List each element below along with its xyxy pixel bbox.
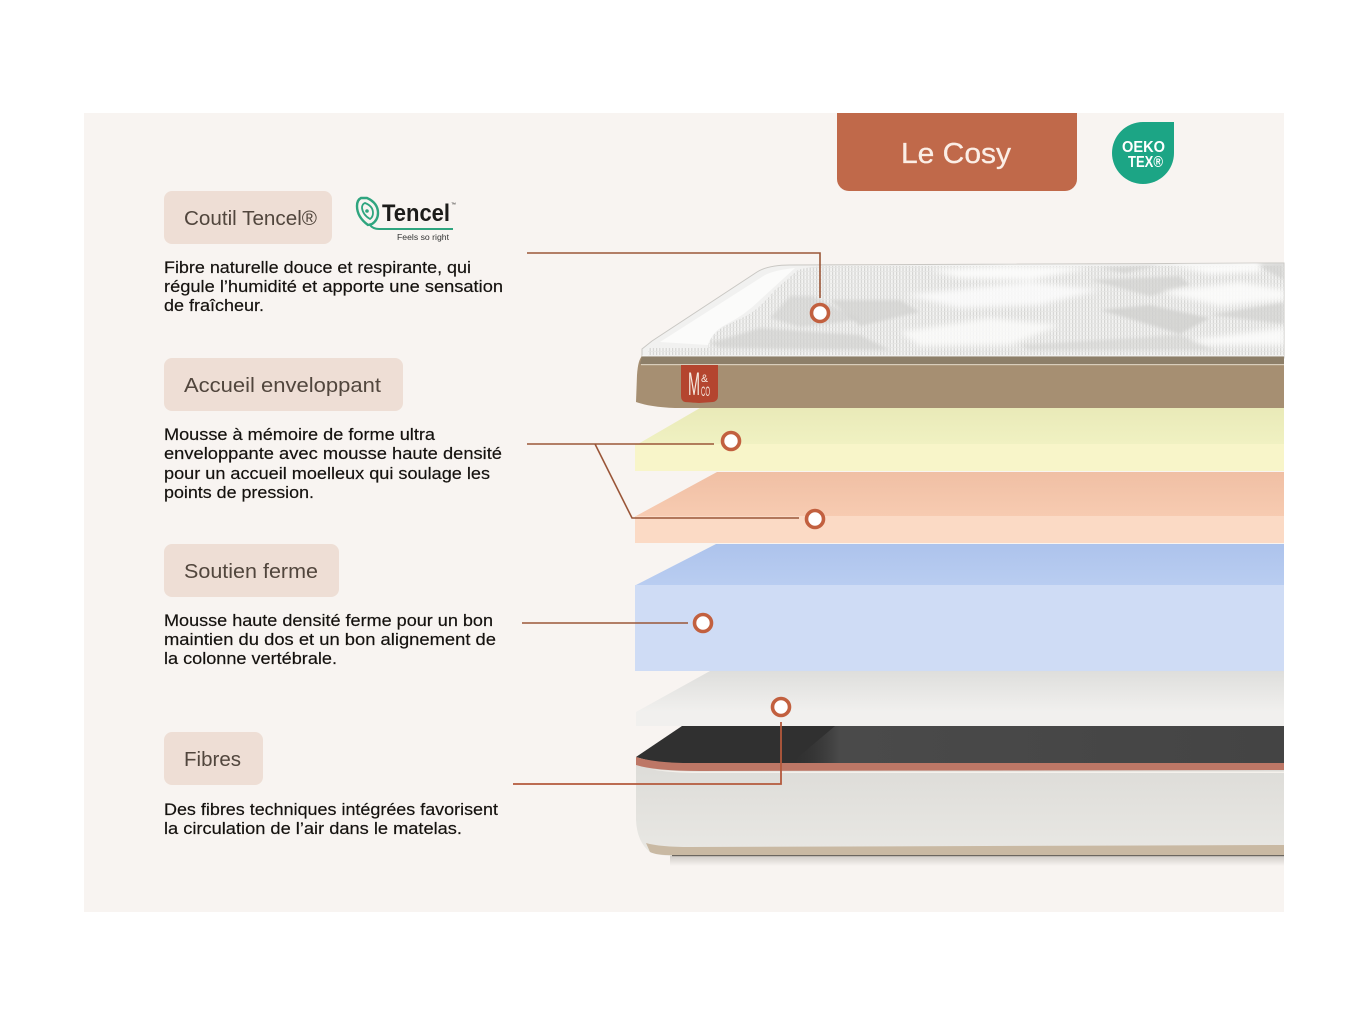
- tag: Coutil Tencel: [164, 191, 332, 244]
- section: Fibres: [164, 732, 499, 838]
- tag: Soutien ferme: [164, 544, 339, 597]
- tag: Accueil enveloppant: [164, 358, 403, 411]
- tag: Fibres: [164, 732, 263, 785]
- connector: Fibres: [513, 698, 790, 784]
- description: Accueil enveloppant: enveloppante avec mousse haute densité: [164, 445, 502, 463]
- connector: Coutil Tencel: [527, 253, 828, 322]
- product title tab: Le Cosy: [901, 138, 1012, 170]
- logo: Tencel: Feels so right: [397, 233, 450, 242]
- description: Accueil enveloppant: points de pression.: [164, 484, 314, 502]
- description: Soutien ferme: [164, 612, 496, 668]
- description: Fibres: Des fibres techniques intégrées favorisent: [164, 801, 499, 819]
- section: Coutil Tencel: [164, 191, 503, 315]
- label: M&Co tag: &: [701, 373, 709, 385]
- layer: beige side band: [636, 356, 1284, 408]
- tag: Coutil Tencel: Coutil Tencel®: [184, 207, 317, 230]
- logo: Tencel: Tencel: [382, 200, 450, 227]
- description: Soutien ferme: Mousse haute densité ferme pour un bon: [164, 612, 493, 630]
- infographic: [84, 113, 1284, 912]
- tag: Fibres: Fibres: [184, 748, 241, 771]
- icon: Oeko-Tex badge: [1112, 122, 1174, 184]
- description: Accueil enveloppant: [164, 426, 502, 502]
- description: Coutil Tencel: de fraîcheur.: [164, 297, 264, 315]
- label: M&Co tag: M: [688, 366, 700, 402]
- layer: high density foam: [635, 472, 1284, 543]
- description: Accueil enveloppant: pour un accueil moelleux qui soulage les: [164, 465, 490, 483]
- description: Soutien ferme: maintien du dos et un bon alignement de: [164, 631, 496, 649]
- logo: Tencel: [357, 198, 456, 242]
- description: Accueil enveloppant: Mousse à mémoire de forme ultra: [164, 426, 436, 444]
- description: Coutil Tencel: Fibre naturelle douce et respirante, qui: [164, 259, 471, 277]
- product title tab: [837, 113, 1077, 191]
- label: M&Co tag: CO: [701, 383, 710, 399]
- description: Fibres: la circulation de l’air dans le matelas.: [164, 820, 462, 838]
- section: Accueil enveloppant: [164, 358, 502, 502]
- mattress base: [636, 726, 1284, 866]
- tag: Soutien ferme: Soutien ferme: [184, 560, 318, 583]
- description: Coutil Tencel: [164, 259, 503, 315]
- layer: memory foam: [635, 408, 1284, 471]
- description: Coutil Tencel: régule l’humidité et apporte une sensation: [164, 278, 503, 296]
- description: Fibres: [164, 801, 499, 838]
- description: Soutien ferme: la colonne vertébrale.: [164, 650, 337, 668]
- logo: Tencel: ™: [451, 202, 456, 208]
- connector: Soutien ferme: [522, 614, 712, 632]
- background panel: [84, 113, 1284, 912]
- layer: white fibre: [636, 671, 1284, 726]
- connector: Accueil enveloppant: [527, 432, 824, 528]
- label: M&Co tag: [681, 365, 718, 403]
- icon: Oeko-Tex badge: OEKO: [1122, 139, 1165, 156]
- layer: quilted Tencel cover: [642, 262, 1284, 358]
- mattress exploded view: [635, 262, 1284, 866]
- icon: Oeko-Tex badge: TEX®: [1128, 154, 1163, 171]
- section: Soutien ferme: [164, 544, 496, 668]
- layer: firm support foam: [635, 544, 1284, 671]
- tag: Accueil enveloppant: Accueil enveloppant: [184, 374, 381, 397]
